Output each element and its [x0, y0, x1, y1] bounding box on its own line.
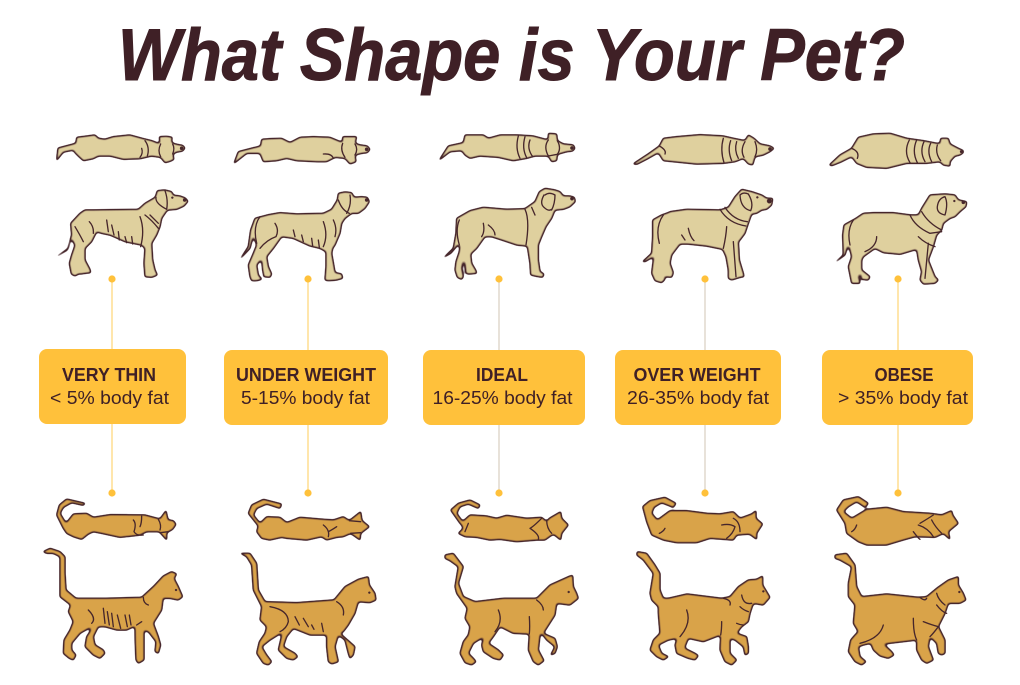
cat side view: very thin [43, 548, 183, 663]
connector: ideal [495, 275, 503, 497]
dog side view: under weight [241, 192, 369, 281]
cat side view: over weight [637, 552, 770, 665]
label box: obese [822, 350, 973, 425]
connector: very thin [108, 275, 116, 497]
label box: under weight: UNDER WEIGHT [236, 365, 376, 385]
label box: under weight: 5-15% body fat [241, 388, 370, 408]
label box: over weight: 26-35% body fat [627, 388, 769, 408]
label box: over weight: OVER WEIGHT [634, 365, 760, 385]
label box: very thin [39, 349, 186, 424]
label box: under weight [224, 350, 388, 425]
cat top view: ideal [451, 500, 568, 542]
label box: over weight [615, 350, 781, 425]
label box: obese: > 35% body fat [838, 388, 968, 408]
dog side view: obese [836, 194, 967, 284]
dog top view: under weight [234, 137, 370, 164]
cat side view: ideal [445, 553, 578, 665]
label box: obese: OBESE [874, 365, 934, 385]
label box: very thin: < 5% body fat [50, 388, 169, 408]
connector: obese [894, 275, 902, 497]
cat top view: over weight [643, 497, 763, 543]
dog side view: over weight [643, 189, 773, 283]
title: What Shape is Your Pet? [118, 15, 905, 96]
dog top view: over weight [633, 135, 774, 165]
label box: ideal: IDEAL [476, 365, 528, 385]
connector: under weight [304, 275, 312, 497]
dog top view: obese [829, 133, 963, 168]
connector: over weight [701, 275, 709, 497]
label box: ideal [423, 350, 585, 425]
label box: ideal: 16-25% body fat [432, 388, 572, 408]
dog side view: very thin [57, 190, 188, 277]
cat side view: under weight [241, 553, 376, 665]
cat side view: obese [835, 553, 966, 665]
dog side view: ideal [444, 188, 575, 279]
cat top view: very thin [57, 499, 176, 540]
cat top view: obese [837, 497, 958, 545]
cat top view: under weight [248, 499, 369, 540]
dog top view: very thin [57, 135, 185, 163]
label box: very thin: VERY THIN [62, 365, 156, 385]
dog top view: ideal [439, 133, 575, 162]
